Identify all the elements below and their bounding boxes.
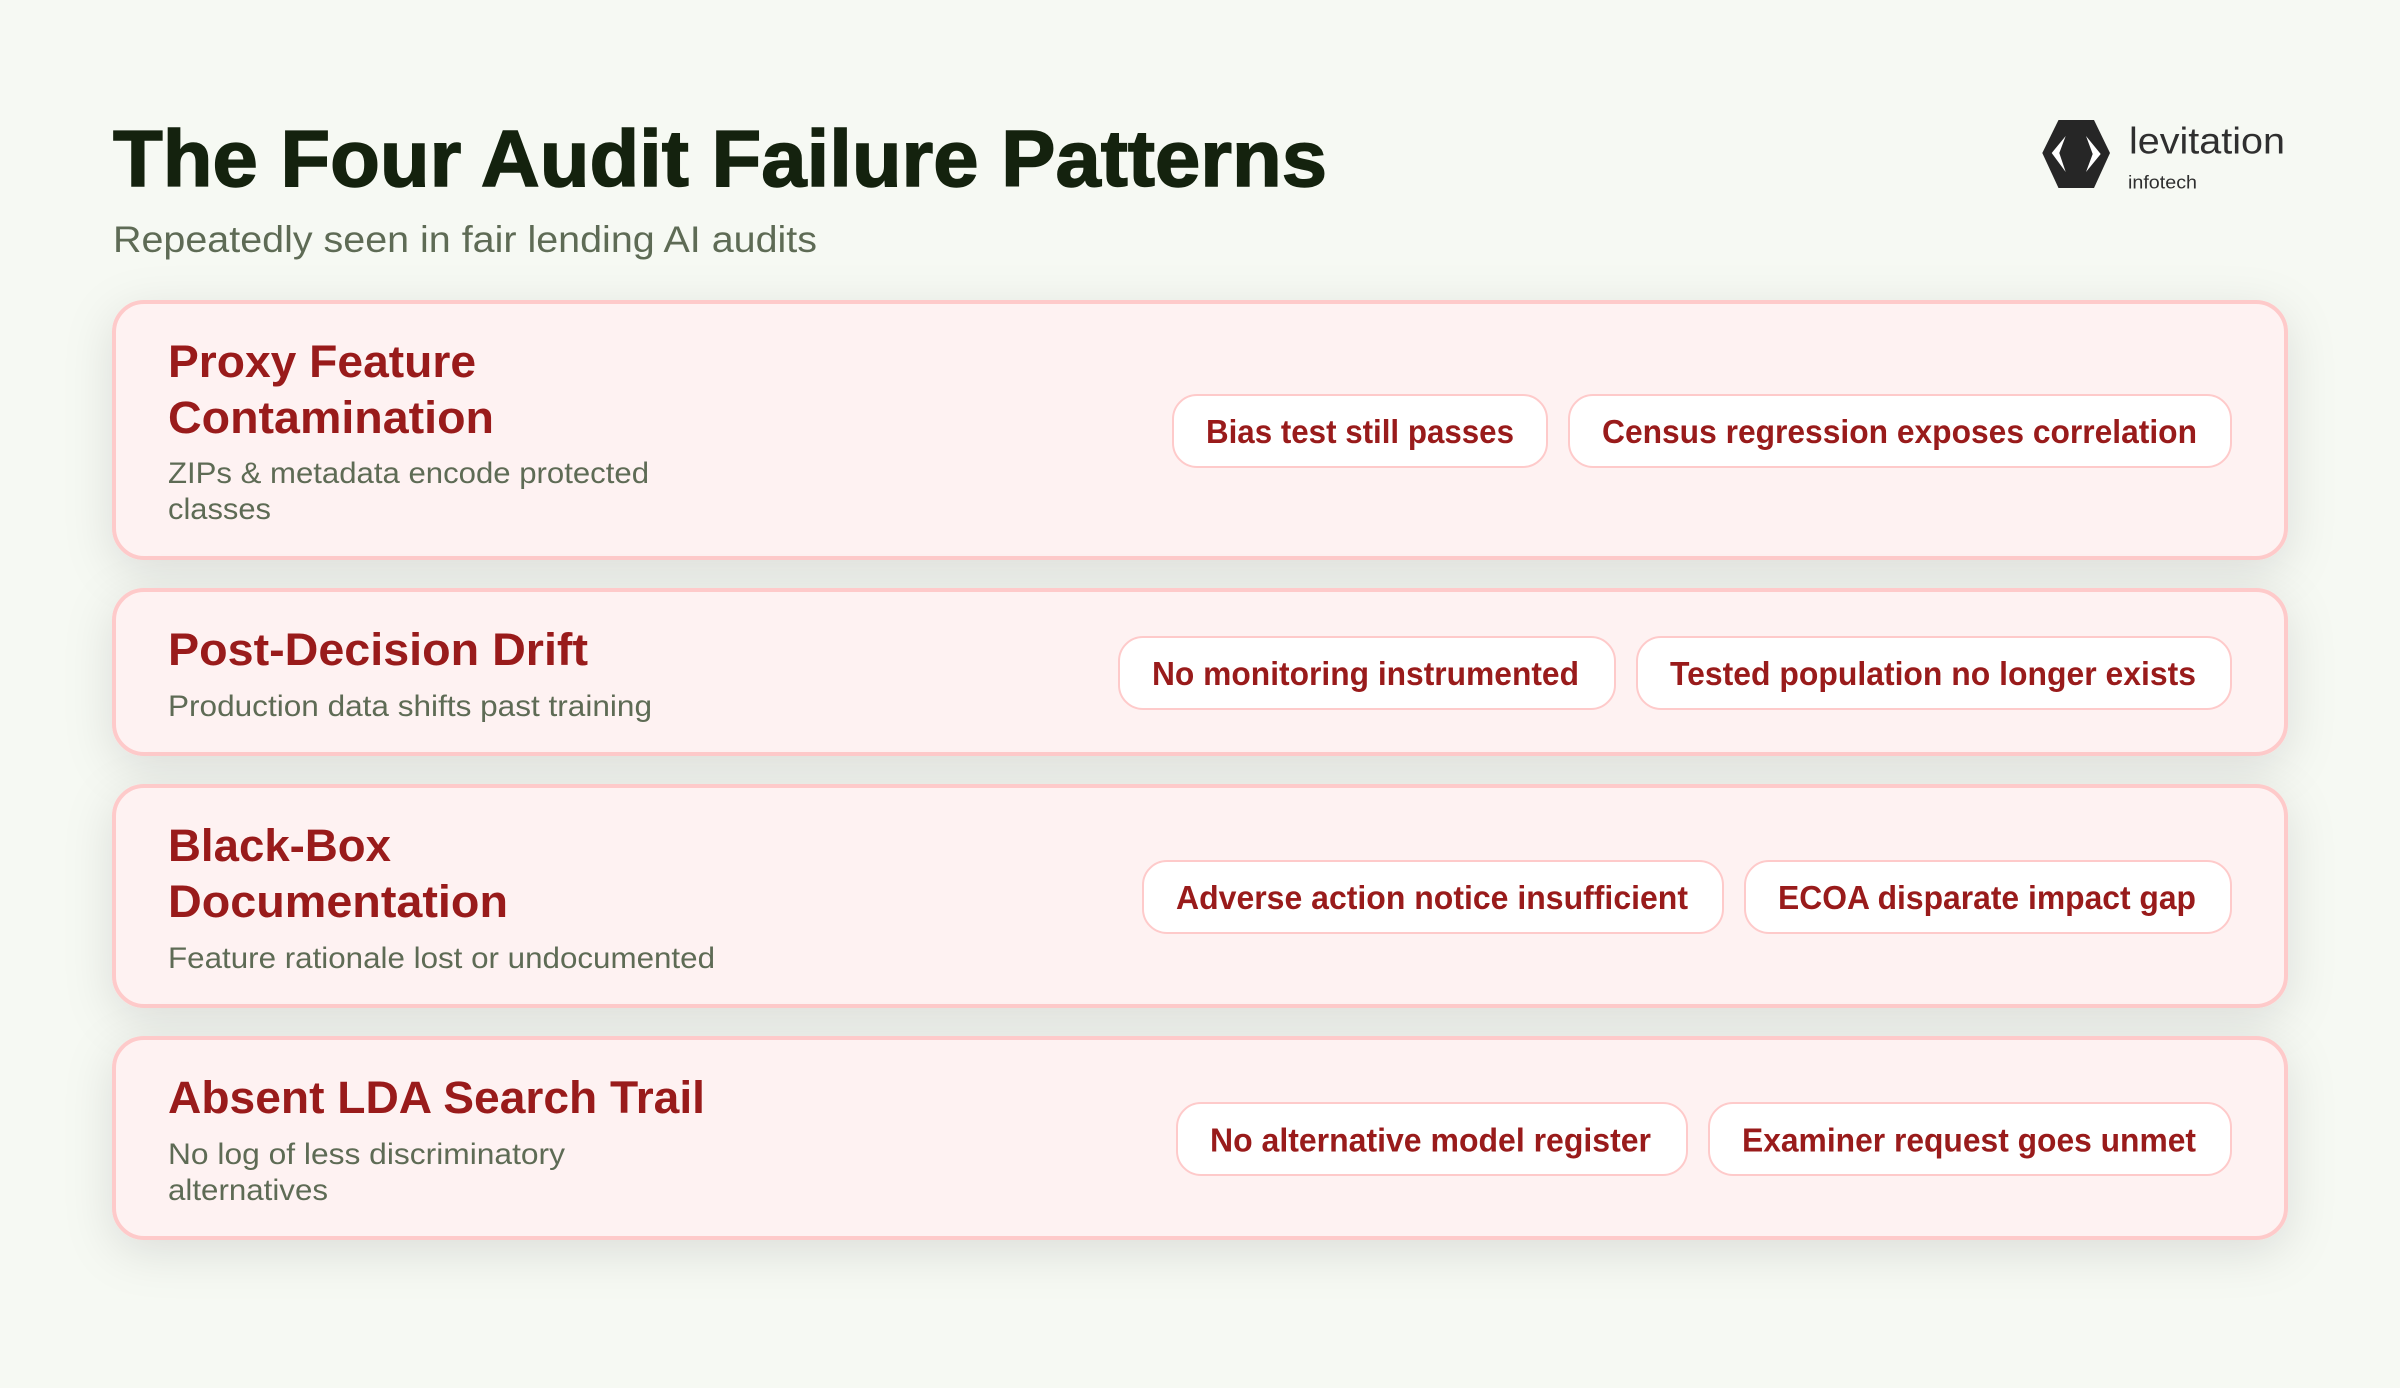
icon: hexagon with chevrons xyxy=(2042,120,2110,188)
panel: absent lda search trail xyxy=(114,1038,2286,1238)
pill: bias test xyxy=(1173,395,1547,467)
card description: Production data shifts past training xyxy=(168,690,652,723)
pill: no monitoring xyxy=(1119,637,1615,709)
pill: no alternative model xyxy=(1177,1103,1687,1175)
logo wordmark: levitation xyxy=(2129,120,2285,162)
pill: census regression xyxy=(1569,395,2231,467)
pill: no alternative model: No alternative model register xyxy=(1210,1122,1651,1158)
pill: examiner request: Examiner request goes unmet xyxy=(1742,1122,2196,1158)
pill: tested population: Tested population no longer exists xyxy=(1670,655,2196,692)
pill: adverse action xyxy=(1143,861,1723,933)
subtitle: Repeatedly seen in fair lending AI audits xyxy=(113,219,817,260)
card heading: Absent LDA Search Trail xyxy=(168,1072,705,1123)
card heading: Black-Box xyxy=(168,820,391,871)
card heading: Post-Decision Drift xyxy=(168,624,588,675)
card description line 2: classes xyxy=(168,493,271,526)
card description line 2: alternatives xyxy=(168,1174,328,1207)
logo tagline: infotech xyxy=(2128,172,2197,192)
card heading line 2: Contamination xyxy=(168,392,494,443)
panel: black-box documentation xyxy=(114,786,2286,1006)
card description: Feature rationale lost or undocumented xyxy=(168,942,715,975)
pill: adverse action: Adverse action notice insufficient xyxy=(1176,879,1688,916)
card description: No log of less discriminatory xyxy=(168,1138,565,1171)
panel: proxy feature contamination xyxy=(114,302,2286,558)
pill: ecoa: ECOA disparate impact gap xyxy=(1778,879,2196,916)
logo: levitation infotech xyxy=(2042,120,2285,192)
card heading line 2: Documentation xyxy=(168,876,508,927)
panel: post-decision drift xyxy=(114,590,2286,754)
pill: tested population xyxy=(1637,637,2231,709)
pill: examiner request xyxy=(1709,1103,2231,1175)
pill: bias test: Bias test still passes xyxy=(1206,413,1514,450)
title: The Four Audit Failure Patterns xyxy=(113,114,1327,203)
pill: census regression: Census regression exposes correlation xyxy=(1602,413,2197,450)
pill: no monitoring: No monitoring instrumented xyxy=(1152,655,1579,692)
card description: ZIPs & metadata encode protected xyxy=(168,457,649,490)
pill: ecoa xyxy=(1745,861,2231,933)
card heading: Proxy Feature xyxy=(168,336,476,387)
